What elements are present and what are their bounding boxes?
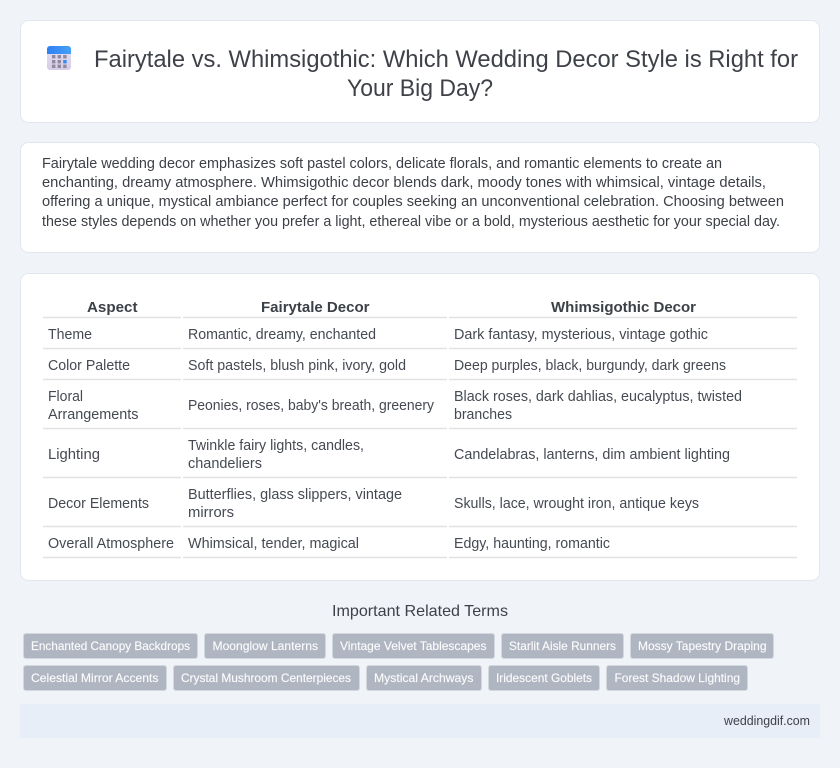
related term tags <box>24 634 774 690</box>
row: overall atmosphere: Edgy, haunting, romantic <box>454 536 610 552</box>
row: decor elements: mirrors <box>188 505 234 521</box>
row: floral arrangements: Arrangements <box>48 407 138 423</box>
panel: comparison table <box>20 274 820 580</box>
row: overall atmosphere <box>48 536 610 552</box>
icon: calendar <box>47 46 71 70</box>
intro paragraph <box>42 156 784 230</box>
row: decor elements: Butterflies, glass slippers, vintage <box>188 487 402 503</box>
row: lighting: chandeliers <box>188 456 262 472</box>
heading: important related terms: Important Related Terms <box>332 603 508 620</box>
footer: weddingdif.com <box>723 714 810 728</box>
table header: Fairytale Decor <box>261 299 370 316</box>
row: lighting: Twinkle fairy lights, candles, <box>188 438 364 454</box>
intro paragraph: enchanting, dreamy atmosphere. Whimsigothic decor blends dark, moody tones with whimsical, vintage details, <box>42 175 766 191</box>
row: overall atmosphere: Whimsical, tender, magical <box>188 536 359 552</box>
intro paragraph: these styles depends on whether you prefer a light, ethereal vibe or a bold, mysterious aesthetic for your special day. <box>42 214 780 230</box>
related term tags: Moonglow Lanterns <box>212 639 318 653</box>
row: floral arrangements: branches <box>454 407 512 423</box>
panel: introduction <box>20 142 820 252</box>
related term tags: Crystal Mushroom Centerpieces <box>181 671 351 685</box>
row: lighting: Lighting <box>48 447 100 463</box>
row: theme: Dark fantasy, mysterious, vintage gothic <box>454 327 708 343</box>
related term tags: Mossy Tapestry Draping <box>638 639 766 653</box>
row: theme <box>48 327 708 343</box>
intro paragraph: Fairytale wedding decor emphasizes soft pastel colors, delicate florals, and romantic elements to create an <box>42 156 722 172</box>
row: color palette: Soft pastels, blush pink, ivory, gold <box>188 358 406 374</box>
row: decor elements <box>48 487 699 521</box>
related term tags: Starlit Aisle Runners <box>509 639 616 653</box>
related term tags: Iridescent Goblets <box>496 671 592 685</box>
title <box>94 46 798 102</box>
row: color palette <box>48 358 726 374</box>
intro paragraph: offering a unique, mystical ambiance perfect for couples seeking an unconventional celebration. Choosing between <box>42 194 784 210</box>
row: theme: Romantic, dreamy, enchanted <box>188 327 376 343</box>
row: floral arrangements: Black roses, dark dahlias, eucalyptus, twisted <box>454 389 742 405</box>
title: Fairytale vs. Whimsigothic: Which Wedding Decor Style is Right for <box>94 46 798 73</box>
related term tags: Celestial Mirror Accents <box>31 671 158 685</box>
table header: Aspect <box>87 299 138 316</box>
row: floral arrangements: Peonies, roses, baby's breath, greenery <box>188 398 435 414</box>
row: color palette: Color Palette <box>48 358 130 374</box>
row: decor elements: Decor Elements <box>48 496 149 512</box>
related term tags: Forest Shadow Lighting <box>614 671 740 685</box>
row: decor elements: Skulls, lace, wrought iron, antique keys <box>454 496 699 512</box>
row: lighting: Candelabras, lanterns, dim ambient lighting <box>454 447 730 463</box>
table header <box>87 299 696 316</box>
related term tags: Enchanted Canopy Backdrops <box>31 639 190 653</box>
footer <box>20 704 820 738</box>
related term tags: Mystical Archways <box>374 671 474 685</box>
row: color palette: Deep purples, black, burgundy, dark greens <box>454 358 726 374</box>
row: theme: Theme <box>48 327 92 343</box>
panel: title header <box>20 20 820 122</box>
title: Your Big Day? <box>347 75 493 102</box>
table header: Whimsigothic Decor <box>551 299 696 316</box>
row: overall atmosphere: Overall Atmosphere <box>48 536 174 552</box>
row: floral arrangements: Floral <box>48 389 83 405</box>
row: lighting <box>48 438 730 472</box>
row: floral arrangements <box>48 389 742 423</box>
related term tags: Vintage Velvet Tablescapes <box>340 639 486 653</box>
